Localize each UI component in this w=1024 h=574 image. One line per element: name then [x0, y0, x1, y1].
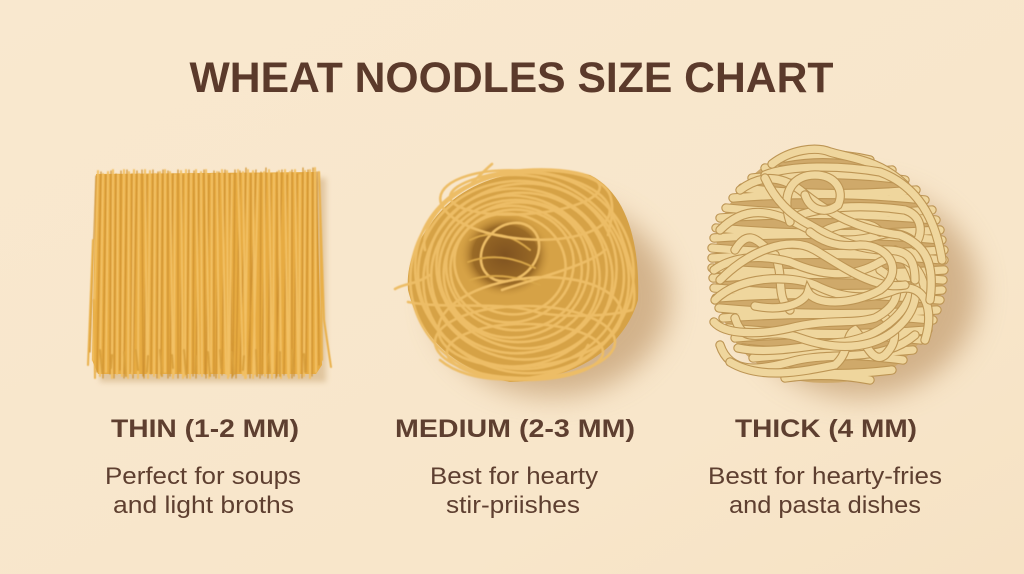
- panel: thin noodles image: [88, 168, 331, 382]
- panel: medium noodles image: [387, 145, 670, 403]
- thick noodles strands: [712, 149, 944, 380]
- label: medium: MEDIUM (2-3 MM): [395, 415, 635, 443]
- description: thick: Bestt for hearty-fries: [708, 463, 942, 490]
- panel: thick noodles image: [712, 148, 978, 397]
- thin noodles strands: [88, 168, 331, 378]
- description: thick: and pasta dishes: [729, 492, 921, 519]
- label: thick: THICK (4 MM): [735, 415, 917, 443]
- title: WHEAT NOODLES SIZE CHART: [190, 54, 834, 102]
- description: thin: and light broths: [113, 492, 294, 519]
- medium noodles strands: [387, 145, 657, 403]
- description: thick: [708, 463, 942, 519]
- description: thin: Perfect for soups: [105, 463, 301, 490]
- description: medium: [430, 463, 598, 519]
- description: medium: Best for hearty: [430, 463, 598, 490]
- description: medium: stir-priishes: [446, 492, 580, 519]
- description: thin: [105, 463, 301, 519]
- label: thin: THIN (1-2 MM): [111, 415, 299, 443]
